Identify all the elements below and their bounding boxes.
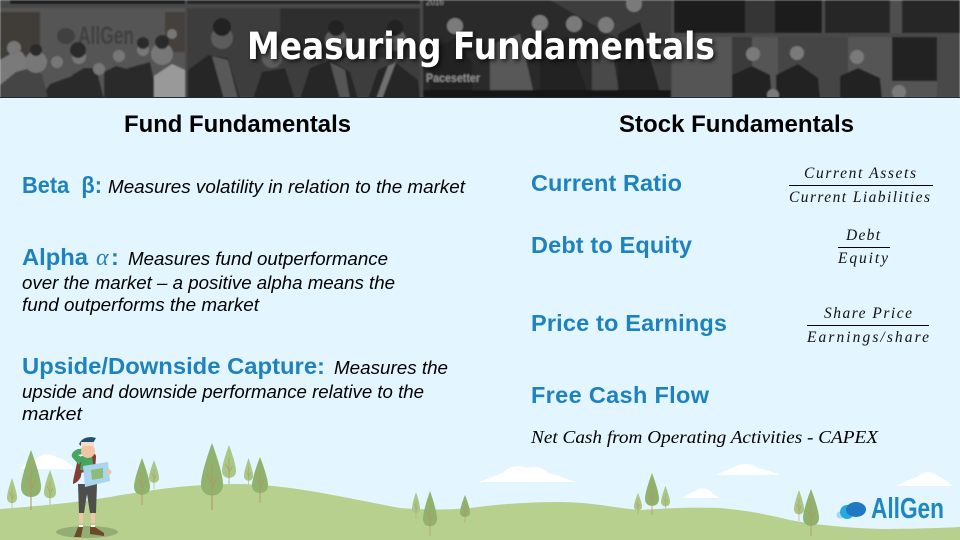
metric: current ratio: Current Assets [804, 165, 916, 182]
metric: debt to equity: Equity [837, 250, 888, 267]
text block: alpha: α [96, 245, 109, 271]
text block: upside/downside capture: Measures the [334, 358, 448, 378]
metric: debt to equity: Debt [845, 227, 881, 244]
text block: alpha: over the market – a positive alpha means the [22, 273, 395, 293]
metric: free cash flow: Net Cash from Operating Activities - CAPEX [530, 427, 879, 447]
text block: alpha: fund outperforms the market [22, 295, 260, 315]
text block: upside/downside capture: Upside/Downside Capture: [22, 353, 325, 379]
photo: top right dark suits [674, 0, 960, 33]
text block: beta: Beta β: [22, 172, 102, 198]
title: Measuring Fundamentals [247, 25, 715, 68]
text block: alpha [22, 244, 395, 315]
cloud: left behind trees [20, 454, 76, 469]
heading: fund fundamentals: Fund Fundamentals [124, 111, 351, 138]
photo: team in front of logo [0, 8, 185, 99]
text block: alpha: Alpha [22, 244, 89, 270]
photo: team in front of logo: AllGen [78, 22, 134, 50]
header bottom edge [0, 97, 960, 98]
metric: free cash flow [530, 382, 879, 447]
photo: four colleagues outdoors [187, 8, 420, 99]
metric: current ratio [531, 165, 933, 206]
photo: top strip middle [187, 0, 420, 4]
metric: free cash flow: Free Cash Flow [531, 382, 710, 408]
hill [0, 484, 960, 540]
panel: stock fundamentals [530, 111, 933, 447]
metric: current ratio: Current Ratio [531, 170, 682, 196]
metric: price to earnings [531, 305, 929, 346]
cloud: far right [897, 472, 952, 486]
text block: beta [22, 172, 466, 198]
metric: price to earnings: Earnings/share [806, 329, 929, 346]
metric: price to earnings: Price to Earnings [531, 310, 727, 336]
front trees [21, 443, 819, 536]
metric: debt to equity [531, 227, 890, 267]
heading: stock fundamentals: Stock Fundamentals [619, 111, 854, 138]
text block: upside/downside capture: market [22, 404, 83, 424]
cloud: right upper [715, 464, 780, 475]
metric: debt to equity: Debt to Equity [531, 232, 692, 258]
text block: upside/downside capture [22, 353, 448, 424]
landscape [0, 437, 960, 540]
cloud: right lower [682, 489, 720, 498]
metric: current ratio: Current Liabilities [789, 189, 930, 206]
header photo collage [0, 0, 960, 101]
metric: price to earnings: Share Price [824, 305, 912, 322]
panel: fund fundamentals [22, 111, 466, 424]
logo: AllGen [836, 493, 944, 525]
hiker with map [56, 437, 118, 538]
photo: Pacesetter award stage [423, 0, 671, 99]
photo: top strip left [10, 0, 185, 4]
cloud: centre [478, 466, 575, 482]
text block: alpha: : [111, 244, 119, 270]
photo: Pacesetter award stage: Pacesetter [426, 71, 480, 85]
back trees [7, 445, 804, 521]
text block: upside/downside capture: upside and downside performance relative to the [22, 382, 424, 402]
text block: beta: Measures volatility in relation to the market [108, 177, 466, 197]
text block: alpha: Measures fund outperformance [128, 249, 388, 269]
photo: team seated in office [672, 36, 938, 97]
